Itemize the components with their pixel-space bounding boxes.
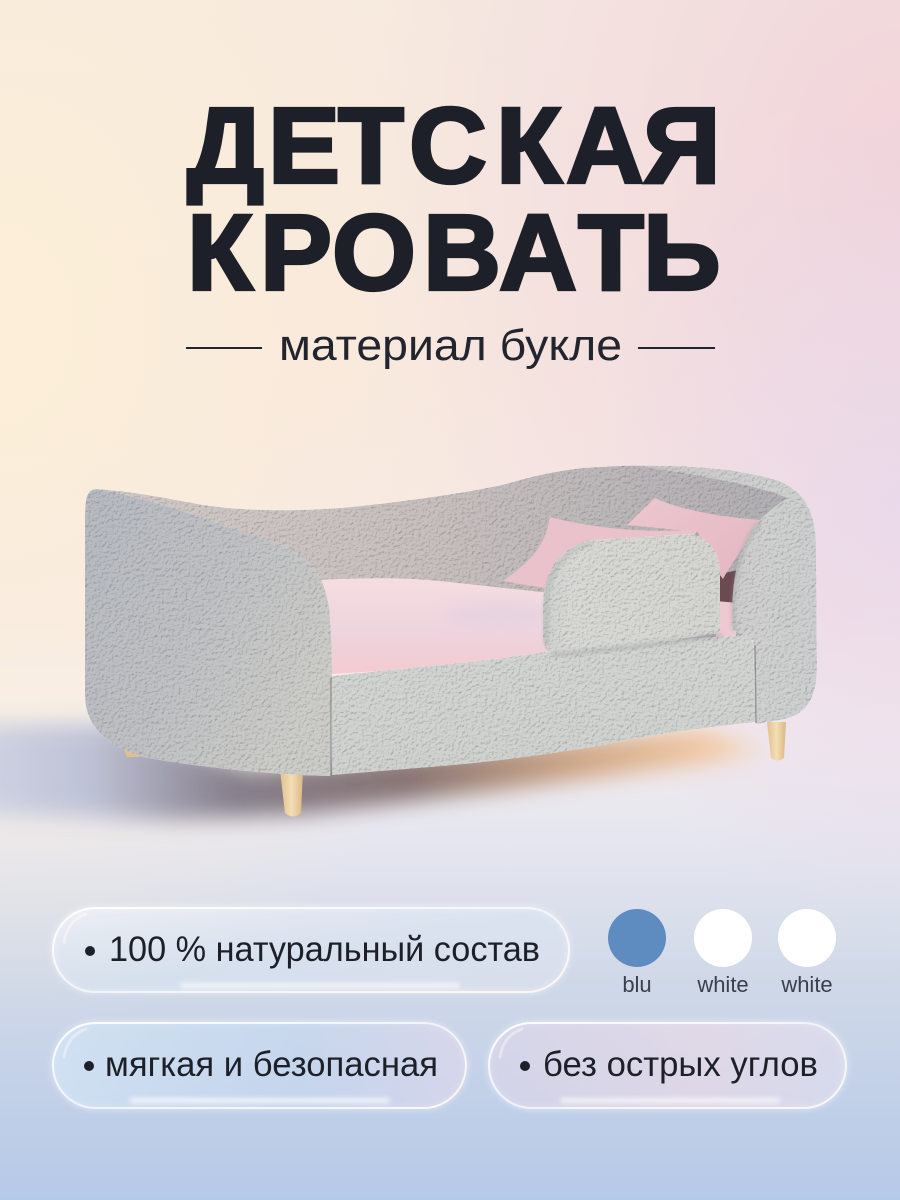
pillow back (627, 498, 761, 579)
feature pill: no sharp corners (489, 1023, 846, 1108)
guard rail edge shading (546, 543, 592, 645)
guard rail contact shadow (552, 635, 722, 655)
dark gap behind pillow (716, 570, 738, 603)
floor shadow (0, 724, 770, 820)
title: ДЕТСКАЯ (187, 84, 721, 206)
colour swatch: blu (608, 909, 666, 997)
feature pill: natural composition (53, 908, 569, 992)
colour swatch: white 2: white (780, 972, 833, 997)
mattress (316, 578, 736, 674)
colour swatch: blu: blu (622, 972, 652, 997)
right arm with top rim (640, 466, 817, 724)
subtitle with side rules: материал букле (279, 321, 622, 370)
bed illustration (0, 466, 817, 820)
feature pill: no sharp corners: без острых углов (543, 1045, 818, 1084)
left arm (85, 489, 332, 776)
right arm inner shadow (733, 522, 760, 630)
feature pill: soft and safe: мягкая и безопасная (105, 1045, 438, 1084)
title: КРОВАТЬ (187, 192, 721, 312)
front rail (332, 635, 756, 775)
colour swatch: white 2 (778, 909, 836, 997)
arm and rail seams (331, 645, 756, 776)
back legs and front legs (124, 722, 786, 816)
colour swatch: white: white (696, 972, 749, 997)
feature pill: natural composition: 100 % натуральный состав (109, 930, 540, 969)
feature pill: soft and safe (53, 1023, 466, 1108)
guard rail (543, 534, 720, 654)
bed back (97, 466, 816, 640)
title (187, 84, 721, 312)
colour swatch: white (694, 909, 752, 997)
pillow front (503, 517, 698, 588)
